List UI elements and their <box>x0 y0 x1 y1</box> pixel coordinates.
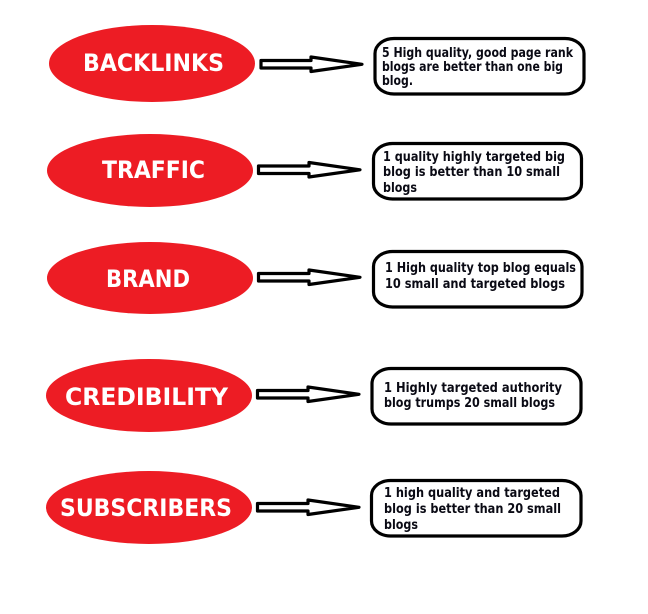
callout: brand: 10 small and targeted blogs <box>385 277 565 292</box>
arrow: subscribers <box>258 500 359 514</box>
oval: traffic <box>47 134 253 207</box>
callout: backlinks: blog. <box>382 74 413 89</box>
callout: subscribers: blog is better than 20 small <box>384 502 561 517</box>
row: traffic <box>47 134 582 207</box>
callout: backlinks: 5 High quality, good page rank <box>382 46 573 61</box>
callout: traffic: 1 quality highly targeted big <box>383 150 565 165</box>
callout: subscribers: 1 high quality and targeted <box>384 486 560 501</box>
callout: traffic: blog is better than 10 small <box>383 165 560 180</box>
oval: brand: BRAND <box>106 265 190 293</box>
oval: backlinks <box>49 25 255 102</box>
row: credibility <box>46 359 581 432</box>
callout: credibility: blog trumps 20 small blogs <box>384 396 555 411</box>
callout: credibility <box>372 368 581 424</box>
oval: subscribers: SUBSCRIBERS <box>60 494 232 522</box>
arrow: credibility <box>258 387 359 402</box>
oval: brand <box>47 242 253 314</box>
oval: traffic: TRAFFIC <box>102 156 205 184</box>
callout: traffic: blogs <box>383 181 417 196</box>
row: subscribers <box>46 471 581 544</box>
callout: subscribers <box>372 480 581 536</box>
oval: subscribers <box>46 471 252 544</box>
callout: credibility: 1 Highly targeted authority <box>384 381 562 396</box>
arrow: backlinks <box>261 57 362 72</box>
callout: brand <box>374 252 582 307</box>
oval: credibility <box>46 359 252 432</box>
arrow: traffic <box>258 162 360 177</box>
callout: subscribers: blogs <box>384 518 418 533</box>
oval: backlinks: BACKLINKS <box>83 49 224 77</box>
callout: backlinks: blogs are better than one big <box>382 60 563 75</box>
callout: brand: 1 High quality top blog equals <box>385 261 576 276</box>
oval: credibility: CREDIBILITY <box>65 383 229 411</box>
row: brand <box>47 242 582 314</box>
arrow: brand <box>258 270 360 284</box>
row: backlinks <box>49 25 584 102</box>
callout: backlinks <box>375 38 584 94</box>
callout: traffic <box>374 144 582 199</box>
